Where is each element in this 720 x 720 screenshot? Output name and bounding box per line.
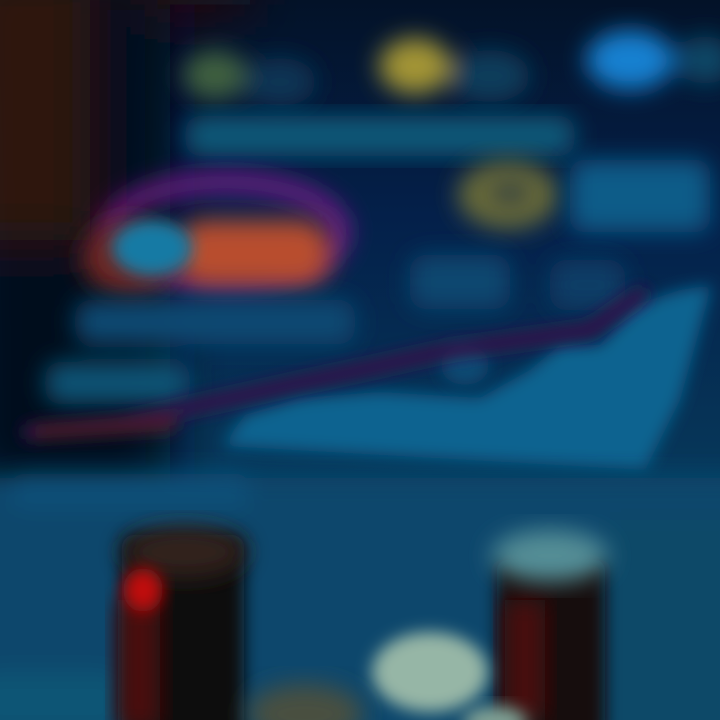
right cup <box>492 530 608 720</box>
pale round cup top <box>372 632 488 712</box>
left cup <box>118 526 246 720</box>
olive round object <box>247 684 363 720</box>
teal side block <box>570 160 710 232</box>
olive ring icon <box>458 161 558 229</box>
left dark edge with reddish brown glow <box>0 0 250 490</box>
area chart <box>225 285 712 470</box>
small chart blob <box>441 345 489 385</box>
teal header bar <box>185 116 575 156</box>
lower panel <box>0 474 720 720</box>
dark red trend line <box>30 295 640 432</box>
teal text bars <box>45 255 625 404</box>
pale foreground object <box>463 706 527 720</box>
top row of legend blobs <box>183 30 720 106</box>
highlighted oval callout <box>82 182 340 296</box>
